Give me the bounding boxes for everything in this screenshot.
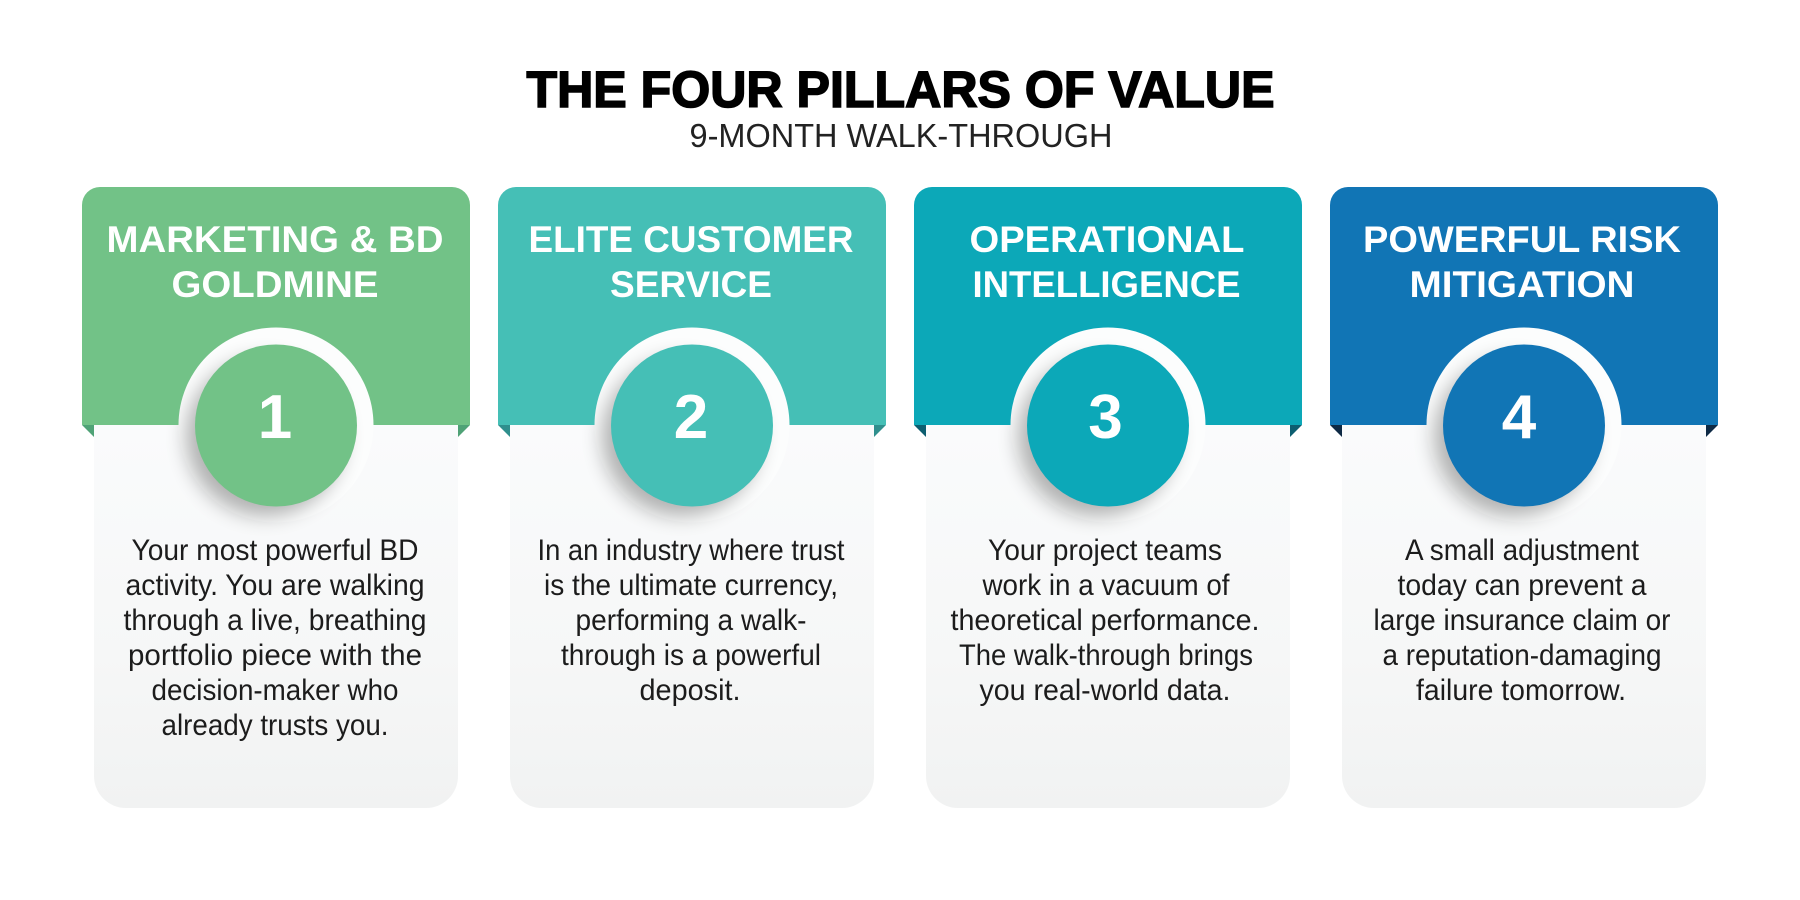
heading: SERVICE: [610, 264, 772, 305]
ribbon folds: [914, 425, 1302, 437]
heading: GOLDMINE: [172, 264, 378, 305]
panel body: [510, 425, 874, 808]
heading: [970, 219, 1244, 305]
body text: In an industry where trust: [538, 534, 844, 567]
number badge 4: 4: [1502, 383, 1537, 452]
ribbon folds: [1330, 425, 1718, 437]
number badge 2: [594, 328, 790, 522]
body text: already trusts you.: [162, 709, 388, 742]
number badge 2: 2: [674, 383, 708, 452]
title: THE FOUR PILLARS OF VALUE: [526, 61, 1274, 118]
number badge 3: 3: [1088, 383, 1123, 452]
ribbon folds: [82, 425, 470, 437]
panel body: [94, 425, 458, 808]
body text: A small adjustment: [1405, 534, 1639, 567]
body text: Your most powerful BD: [132, 534, 418, 567]
number badge 3: [1010, 328, 1206, 522]
header band: [82, 187, 470, 425]
subtitle: 9-MONTH WALK-THROUGH: [690, 117, 1112, 154]
ribbon folds: [498, 425, 886, 437]
number badge 4: [1426, 328, 1622, 522]
panel body: [1342, 425, 1706, 808]
heading: OPERATIONAL: [970, 219, 1244, 260]
header band: [914, 187, 1302, 425]
heading: ELITE CUSTOMER: [528, 219, 854, 260]
heading: MARKETING & BD: [106, 219, 444, 260]
heading: [1363, 219, 1681, 305]
body text: The walk-through brings: [959, 639, 1253, 672]
body text: through is a powerful: [561, 639, 821, 672]
heading: [528, 219, 854, 305]
panel body: [926, 425, 1290, 808]
panel: operational intelligence: [914, 187, 1302, 808]
body text: performing a walk-: [576, 604, 806, 637]
body text: [1374, 534, 1671, 707]
heading: POWERFUL RISK: [1363, 219, 1681, 260]
body text: a reputation-damaging: [1382, 639, 1662, 672]
body text: Your project teams: [988, 534, 1222, 567]
body text: portfolio piece with the: [128, 639, 422, 672]
header band: [1330, 187, 1718, 425]
number badge 1: [178, 328, 374, 522]
body text: today can prevent a: [1398, 569, 1647, 602]
panel: elite customer service: [498, 187, 886, 808]
body text: decision-maker who: [152, 674, 398, 707]
body text: [950, 534, 1260, 707]
body text: deposit.: [640, 674, 740, 707]
number badge 1: 1: [258, 383, 292, 452]
panel: marketing and BD goldmine: [82, 187, 470, 808]
body text: theoretical performance.: [950, 604, 1260, 637]
body text: through a live, breathing: [124, 604, 426, 637]
body text: failure tomorrow.: [1416, 674, 1626, 707]
body text: activity. You are walking: [126, 569, 424, 602]
body text: work in a vacuum of: [982, 569, 1230, 602]
body text: [538, 534, 844, 707]
header band: [498, 187, 886, 425]
heading: INTELLIGENCE: [972, 264, 1240, 305]
body text: is the ultimate currency,: [544, 569, 838, 602]
heading: MITIGATION: [1410, 264, 1634, 305]
heading: [106, 219, 444, 305]
body text: large insurance claim or: [1374, 604, 1671, 637]
body text: [124, 534, 426, 742]
panel: powerful risk mitigation: [1330, 187, 1718, 808]
body text: you real-world data.: [980, 674, 1230, 707]
